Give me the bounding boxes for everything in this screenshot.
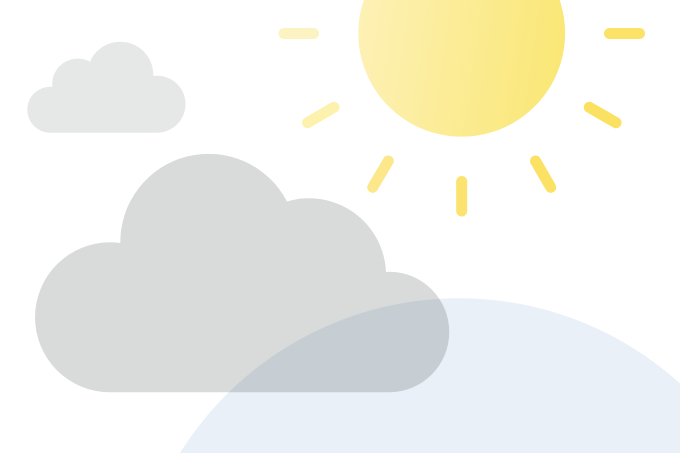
icon: large cloud	[35, 154, 449, 392]
ray: lower right	[589, 107, 616, 123]
ray: bottom right	[536, 161, 551, 187]
ray: lower left	[308, 107, 334, 123]
hill: pale blue translucent arc	[180, 298, 680, 453]
icon: sun disc	[358, 0, 565, 137]
ray: bottom left	[373, 161, 388, 187]
ray: left	[284, 28, 314, 39]
ray: right	[610, 28, 640, 39]
icon: small cloud	[27, 42, 186, 133]
icon: sun rays	[284, 34, 640, 211]
ray: bottom	[456, 182, 467, 211]
